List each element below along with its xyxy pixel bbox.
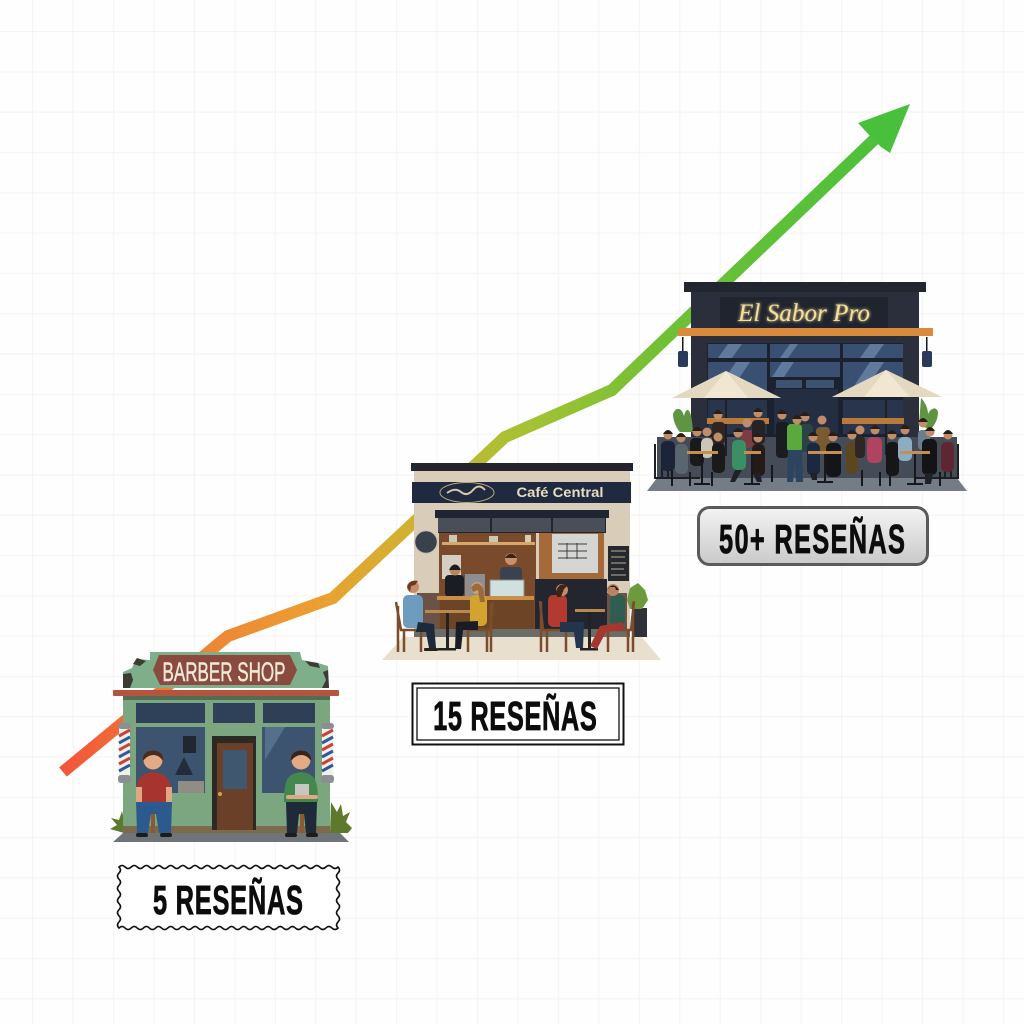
man in red shirt	[136, 750, 172, 837]
shop: barber shop	[110, 652, 352, 842]
label: 15 reseñas	[412, 684, 624, 744]
awning	[113, 690, 339, 696]
wall	[414, 471, 630, 629]
plant	[627, 583, 648, 637]
windows	[136, 703, 205, 723]
logo	[440, 482, 494, 502]
shop: café central	[382, 463, 661, 660]
plants	[110, 802, 352, 833]
neon sign panel	[720, 297, 888, 328]
seated guests bodies	[661, 436, 954, 477]
planter boxes	[707, 418, 769, 424]
green shirt man	[787, 424, 803, 482]
right table group	[540, 584, 634, 652]
roof	[411, 463, 633, 471]
roof	[684, 282, 926, 292]
guest legs	[730, 470, 933, 484]
tables	[687, 451, 930, 454]
sign	[153, 655, 297, 685]
growth arrow	[63, 104, 910, 772]
hair	[663, 408, 953, 437]
railings	[655, 444, 958, 478]
plants	[673, 398, 938, 432]
display case	[490, 580, 524, 597]
label: 15 reseñas: 15 RESEÑAS	[433, 694, 597, 740]
sign band	[412, 482, 631, 503]
awning	[678, 328, 933, 336]
pavement	[382, 637, 661, 660]
right window	[539, 533, 604, 580]
base strip	[414, 629, 630, 637]
chalkboard	[608, 546, 629, 581]
building facade	[123, 696, 330, 833]
shutter	[435, 510, 609, 518]
building	[691, 292, 919, 437]
shop: el sabor pro	[647, 282, 967, 491]
crowd	[655, 408, 958, 486]
label: 5 reseñas: 5 RESEÑAS	[153, 878, 303, 924]
label: 5 reseñas	[117, 865, 340, 930]
label: 50+ reseñas	[698, 508, 928, 564]
heads	[664, 408, 952, 442]
sidewalk	[113, 833, 349, 842]
round wall sign	[414, 530, 438, 554]
standing guests	[712, 420, 930, 458]
seating wall panels	[417, 593, 439, 629]
barber poles	[118, 723, 334, 783]
umbrellas	[672, 370, 942, 456]
lamps	[678, 337, 932, 367]
left table group	[396, 581, 493, 652]
windows	[707, 343, 903, 437]
counter	[437, 596, 534, 600]
shop: barber shop: BARBER SHOP	[162, 657, 286, 687]
interior	[439, 533, 536, 629]
shop: el sabor pro: El Sabor Pro	[737, 300, 870, 327]
door	[212, 736, 256, 830]
shop: café central: Café Central	[516, 485, 604, 500]
baristas	[445, 553, 522, 597]
label: 50+ reseñas: 50+ RESEÑAS	[719, 517, 905, 563]
man in green shirt	[284, 750, 318, 837]
pediment	[123, 652, 329, 688]
patio floor	[657, 437, 957, 478]
